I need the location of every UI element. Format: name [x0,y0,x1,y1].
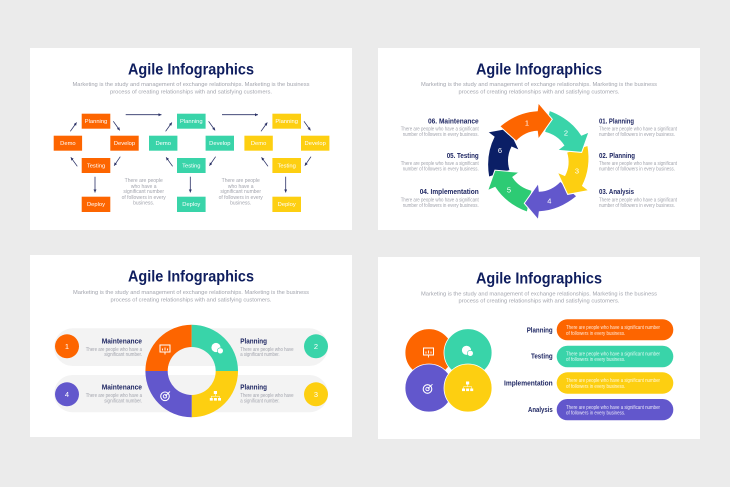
flow: teal: Testing [182,164,200,170]
label: 03 analysis: There are people who have a significant [599,197,678,203]
row: implementation: There are people who have a significant number [566,378,660,384]
flow: orange: Planning [85,119,107,125]
subtitle [72,82,310,96]
flow: orange: Testing [87,164,105,170]
note: right: There are people [222,178,260,184]
row: analysis: of followers in every business. [566,410,625,416]
row: analysis: Analysis [528,405,553,414]
row: planning: Planning [527,325,553,334]
label: 02 planning: number of followers in every business. [599,167,675,173]
title: Agile Infographics [128,268,254,286]
label: planning top: a significant number. [240,352,280,358]
row: testing: Testing [531,352,553,361]
flow: teal: Develop [209,141,230,147]
label: maintenance bottom: significant number. [104,399,142,405]
arrow numbers: 1 [525,119,529,128]
title: Agile Infographics [128,62,254,78]
arrow: orange to teal [126,114,162,116]
row: implementation: of followers in every business. [566,384,625,390]
icon: target [423,384,432,393]
flow: yellow: Planning [275,119,298,125]
label: 06 maintenance [401,116,479,138]
flow: yellow: Deploy [278,202,296,208]
arrow: teal to yellow [222,114,258,116]
badge 4: 4 [65,390,69,399]
label: 02 planning: There are people who have a significant [599,161,678,167]
subtitle: process of creating relationships with and satisfying customers. [110,297,272,303]
label: 06 maintenance: 06. Maintenance [428,116,479,125]
note: left [122,178,166,207]
flow: orange: Deploy [87,202,105,208]
label: 01 planning: 01. Planning [599,116,634,125]
label: 04 implementation [401,187,479,209]
flow: teal: Deploy [182,202,200,208]
row: testing [531,346,673,367]
flow: teal [149,114,234,212]
label: maintenance bottom: There are people who have a [86,393,142,399]
label: 03 analysis: number of followers in every business. [599,203,675,209]
icon: hierarchy [210,391,221,401]
label: 04 implementation: number of followers in every business. [403,203,479,209]
note: left: who have a [131,184,157,190]
icon: chart board [424,348,434,358]
icon: coins [462,346,473,356]
icon: target [161,392,170,401]
label: planning bottom [240,382,294,405]
panel: circular arrows [378,48,700,230]
label: planning top [240,336,294,358]
label: 01 planning: number of followers in every business. [599,132,675,138]
label: 05 testing: number of followers in every business. [403,167,479,173]
label: maintenance top [86,336,142,358]
flow: orange: Develop [114,141,135,147]
note: right: business. [230,201,251,207]
label: 03 analysis [599,187,678,209]
arrow numbers: 6 [498,146,502,155]
label: 06 maintenance: There are people who have a significant [401,126,479,132]
subtitle [421,82,657,96]
label: 04 implementation: 04. Implementation [420,187,479,196]
arrow numbers [498,119,579,205]
row: implementation: Implementation [504,378,553,387]
note: right: significant number [220,189,261,195]
subtitle: process of creating relationships with and satisfying customers. [458,90,620,96]
label: 05 testing: There are people who have a significant [401,161,479,167]
note: right: of followers in every [219,195,263,201]
label: 02 planning: 02. Planning [599,151,635,160]
subtitle: Marketing is the study and management of exchange relationships. Marketing is the business [72,82,310,88]
label: 04 implementation: There are people who have a significant [401,197,479,203]
label: 05 testing: 05. Testing [447,151,479,160]
note: right [219,178,263,207]
label: 02 planning [599,151,678,173]
arrow numbers: 5 [507,185,511,194]
badge 3: 3 [314,390,318,399]
subtitle: Marketing is the study and management of exchange relationships. Marketing is the business [421,291,657,297]
label: planning top: Planning [240,336,267,345]
row: analysis: There are people who have a significant number [566,405,660,411]
arrow numbers: 4 [547,196,551,205]
label: 01 planning: There are people who have a significant [599,126,678,132]
flow: yellow: Testing [278,164,296,170]
row: implementation [504,372,673,394]
row: planning: of followers in every business. [566,331,625,337]
label: maintenance bottom [86,382,142,405]
badge 2 [304,334,328,358]
note: left: business. [133,201,154,207]
label: maintenance top: There are people who have a [86,347,142,353]
note: right: who have a [228,184,254,190]
flow: teal: Planning [180,119,203,125]
title: Agile Infographics [476,270,602,288]
subtitle: Marketing is the study and management of exchange relationships. Marketing is the business [421,82,657,88]
background pills [54,328,328,412]
row: testing: of followers in every business. [566,357,625,363]
flow: orange: Demo [60,141,76,147]
panel: donut [30,255,352,437]
row: analysis [528,399,673,420]
badge 1 [55,334,79,358]
note: left: significant number [123,189,164,195]
subtitle [421,291,657,305]
flow: teal: Demo [155,141,171,147]
panel: circles and pills [378,257,700,439]
badge 2: 2 [314,342,318,351]
flow: yellow [244,114,329,212]
row: planning [527,319,673,340]
flow: yellow: Demo [251,141,266,147]
badge 3 [304,382,328,406]
badge 1: 1 [65,342,69,351]
panel: process flow [30,48,352,230]
badge 4 [55,382,79,406]
icon: coins [211,343,223,354]
subtitle [73,290,309,303]
label: 01 planning [599,116,678,138]
label: 05 testing [401,151,479,173]
subtitle: process of creating relationships with and satisfying customers. [110,90,272,96]
label: planning bottom: Planning [240,382,267,391]
arrow numbers: 3 [575,166,579,175]
overlapping circles [405,329,492,412]
label: maintenance bottom: Maintenance [102,382,142,391]
subtitle: Marketing is the study and management of exchange relationships. Marketing is the business [73,290,309,296]
row: planning: There are people who have a significant number [566,325,660,331]
label: 06 maintenance: number of followers in every business. [403,132,479,138]
label: maintenance top: significant number. [104,352,142,358]
label: planning bottom: a significant number. [240,399,280,405]
label: planning bottom: There are people who have [240,393,294,399]
note: left: of followers in every [122,195,166,201]
label: maintenance top: Maintenance [102,336,142,345]
row: testing: There are people who have a significant number [566,352,660,358]
note: left: There are people [125,178,163,184]
label: 03 analysis: 03. Analysis [599,187,634,196]
flow: yellow: Develop [305,141,326,147]
icon: chart board [160,345,170,354]
icon: hierarchy [462,382,473,391]
flow: orange [54,114,139,212]
arrow numbers: 2 [564,129,568,138]
arrow ring [468,99,608,224]
label: planning top: There are people who have [240,347,294,353]
donut chart [145,325,238,417]
subtitle: process of creating relationships with and satisfying customers. [458,299,620,305]
title: Agile Infographics [476,62,602,78]
